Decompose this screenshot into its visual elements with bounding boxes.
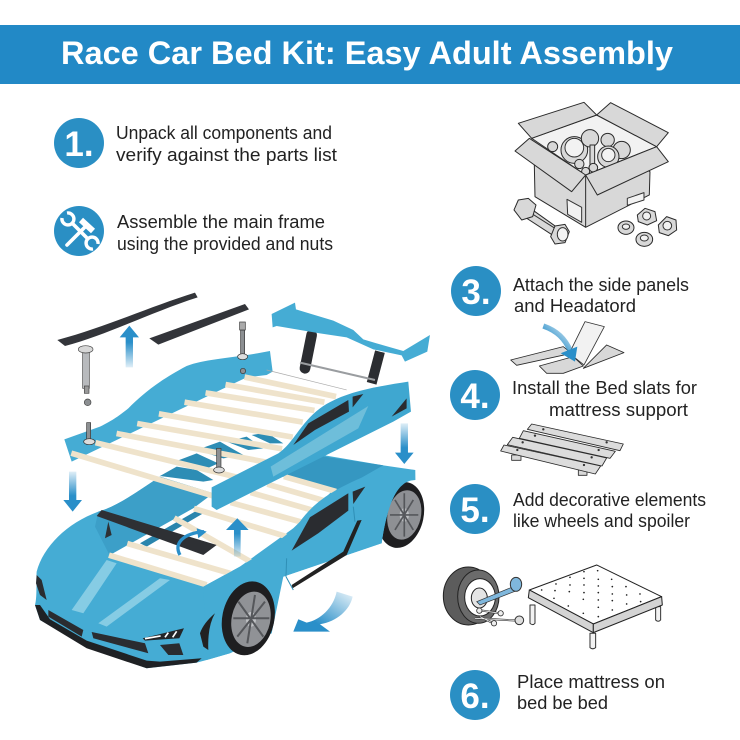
slat bay floor	[110, 477, 333, 587]
step 3: and Headatord	[514, 296, 636, 316]
step 1: Unpack all components and	[116, 123, 332, 143]
icon: bed slats	[501, 424, 623, 475]
lower car body	[35, 450, 430, 668]
step 2 with wrench and hammer icon: using the provided and nuts	[117, 234, 333, 254]
see-through blue gaps	[160, 433, 283, 482]
step 4	[450, 370, 697, 420]
step 5: Add decorative elements	[513, 490, 706, 510]
black rails	[57, 293, 249, 346]
frame bolts	[84, 322, 248, 473]
step 3: 3.	[461, 273, 491, 312]
title banner: Race Car Bed Kit: Easy Adult Assembly	[61, 35, 673, 71]
arrow: down right	[395, 423, 414, 464]
title banner	[0, 25, 740, 84]
far side panel	[64, 351, 273, 462]
step 2 with wrench and hammer icon: Assemble the main frame	[117, 212, 325, 232]
far wall of the bay	[95, 477, 213, 556]
icon: open parts box	[514, 102, 677, 246]
near panel windows	[293, 400, 349, 445]
door line	[286, 507, 355, 590]
nose emblem	[36, 575, 47, 600]
step 4: Install the Bed slats for	[512, 378, 697, 398]
step 6	[450, 670, 665, 720]
front fender slit	[200, 613, 215, 650]
icon: wheel and axle	[443, 567, 524, 626]
step 1: 1.	[64, 125, 94, 164]
step 5: 5.	[460, 491, 490, 530]
arrow: up upper	[120, 326, 139, 367]
step 3	[451, 266, 689, 316]
step 6: 6.	[460, 677, 490, 716]
upper slats	[74, 378, 333, 496]
race car bed exploded illustration	[35, 293, 430, 668]
near panel light stripe	[271, 406, 368, 477]
step 6: Place mattress on	[517, 672, 665, 692]
arrow: down left	[63, 472, 82, 512]
step 5: like wheels and spoiler	[513, 511, 690, 531]
step 4: 4.	[460, 377, 490, 416]
loose bolt	[78, 346, 93, 406]
step 1	[54, 118, 337, 168]
headlight	[143, 628, 184, 641]
side slit	[292, 520, 362, 588]
arrow: up lower	[226, 518, 249, 557]
upper bed frame	[64, 322, 411, 510]
step 5	[450, 484, 706, 534]
front grilles	[48, 610, 83, 637]
front wheel	[215, 576, 281, 660]
step 4: mattress support	[549, 400, 688, 420]
step 3: Attach the side panels	[513, 275, 689, 295]
icon: side panels joined	[511, 322, 624, 373]
step 1: verify against the parts list	[116, 145, 337, 165]
icon: mattress on legs	[528, 565, 662, 649]
far wall of the rear bay	[280, 452, 383, 490]
side sill	[203, 468, 415, 660]
front splitter	[35, 605, 202, 668]
spoiler	[272, 303, 430, 383]
lower slats	[112, 477, 333, 584]
arrow: curved floor	[293, 592, 353, 632]
step 2 with wrench and hammer icon	[54, 206, 333, 256]
near side panel	[212, 382, 411, 510]
step 6: bed be bed	[517, 693, 608, 713]
dark panel on lower bay	[97, 510, 217, 555]
rear wheel	[372, 478, 430, 552]
inner rail	[140, 511, 203, 547]
hood highlights	[72, 560, 117, 613]
dark windows	[292, 493, 348, 551]
far cable	[267, 370, 347, 390]
